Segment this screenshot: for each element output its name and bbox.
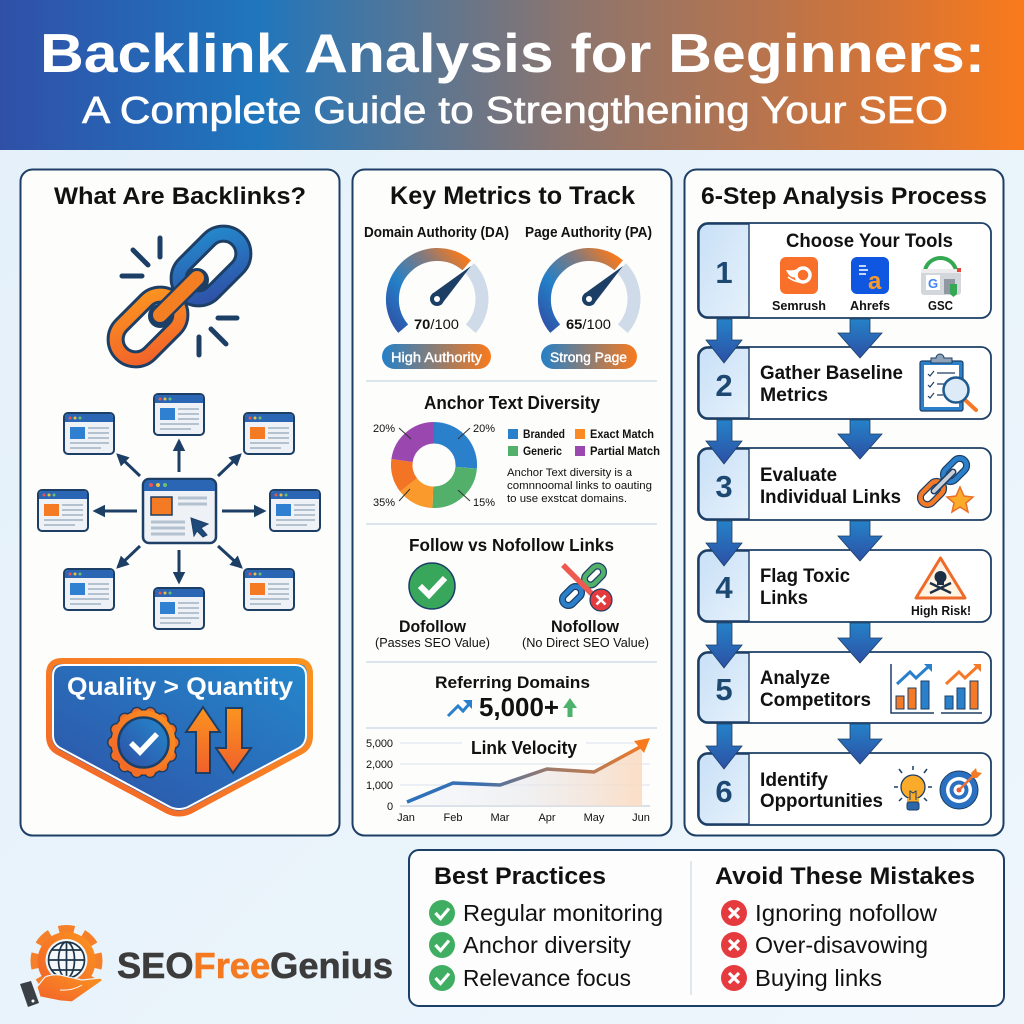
step 1: choose your tools: GSC — [928, 298, 954, 313]
mistakes list: Over-disavowing — [755, 932, 928, 958]
referring domains: Referring Domains — [435, 673, 590, 692]
heading: process: 6-Step Analysis Process — [701, 183, 987, 210]
step 6: identify opportunities — [698, 753, 991, 825]
diagram: site linking out to other sites — [38, 394, 320, 629]
step 3: evaluate individual links: Individual Links — [760, 487, 901, 508]
panel: what are backlinks — [20, 170, 340, 836]
gauge: page authority: Page Authority (PA) — [525, 225, 652, 241]
wordmark: SEOFreeGenius — [117, 945, 393, 986]
arrows: step 2 to 3 — [706, 420, 882, 464]
step 1: choose your tools: Semrush — [772, 298, 826, 313]
icon: ahrefs — [851, 257, 889, 295]
dofollow: Dofollow — [399, 617, 467, 636]
icon: chain link — [107, 225, 252, 368]
step 4: flag toxic links: Links — [760, 588, 808, 609]
step 1: choose your tools: Ahrefs — [850, 298, 890, 313]
arrows: step 5 to 6 — [706, 724, 882, 769]
step 3: evaluate individual links: Evaluate — [760, 465, 837, 486]
line chart: link velocity: 2,000 — [366, 759, 393, 771]
gauge: page authority: Strong Page — [550, 349, 627, 365]
line chart: link velocity: Mar — [491, 812, 510, 824]
step 2: gather baseline metrics: Metrics — [760, 385, 828, 406]
referring domains — [435, 673, 590, 722]
step 3: evaluate individual links — [698, 448, 991, 520]
icon: light bulb — [894, 766, 932, 810]
icon: toxic warning — [911, 558, 971, 618]
arrows: step 1 to 2 — [706, 319, 882, 363]
line chart: link velocity: Jan — [397, 812, 415, 824]
step 3: evaluate individual links: 3 — [715, 469, 733, 504]
icon: ahrefs: a — [868, 268, 882, 295]
badge: quality over quantity — [49, 661, 310, 814]
step 1: choose your tools: 1 — [715, 255, 733, 290]
text: anchor description: Anchor Text diversity is a — [507, 467, 633, 479]
best practices list: Best Practices — [434, 863, 606, 890]
best practices list: Relevance focus — [463, 965, 631, 991]
icon: two bar charts — [891, 664, 982, 713]
title: Backlink Analysis for Beginners: — [40, 22, 985, 84]
donut chart: anchor text: 20% — [373, 423, 395, 435]
arrows — [95, 441, 264, 582]
referring domains: 5,000+ — [479, 692, 559, 722]
donut chart: anchor text: 35% — [373, 497, 395, 509]
icon: google search console — [921, 258, 961, 297]
step 4: flag toxic links: 4 — [715, 570, 733, 605]
icon: gear, globe and hand — [20, 930, 102, 1007]
text: anchor description — [507, 467, 652, 505]
text: anchor description: comnnoomal links to oauting — [507, 480, 652, 492]
arrows: step 3 to 4 — [706, 521, 882, 566]
best practices list: Regular monitoring — [463, 900, 663, 926]
icon: target — [940, 768, 982, 809]
legend: anchor types: Partial Match — [590, 446, 660, 458]
step 2: gather baseline metrics: Gather Baseline — [760, 363, 903, 384]
mistakes list: Buying links — [755, 965, 882, 991]
gauge: domain authority: Domain Authority (DA) — [364, 225, 509, 241]
donut chart: anchor text — [373, 420, 495, 510]
mistakes list — [715, 863, 975, 991]
text: anchor description: to use exstcat domains. — [507, 493, 627, 505]
gauge: page authority — [525, 225, 652, 369]
line chart: link velocity: Feb — [444, 812, 462, 824]
heading: follow vs nofollow: Follow vs Nofollow Links — [409, 535, 614, 555]
icon: clipboard and magnifier — [920, 354, 976, 411]
legend: anchor types: Generic — [523, 446, 563, 458]
heading: anchor text diversity: Anchor Text Diversity — [424, 393, 600, 413]
line chart: link velocity: 1,000 — [366, 780, 393, 792]
logo: SEOFreeGenius — [20, 930, 393, 1007]
step 5: analyze competitors: 5 — [715, 672, 733, 707]
step 4: flag toxic links: Flag Toxic — [760, 566, 850, 587]
step 6: identify opportunities: 6 — [715, 774, 733, 809]
step 5: analyze competitors — [698, 652, 991, 723]
gauge: domain authority: High Authority — [391, 349, 482, 365]
line chart: link velocity: 0 — [387, 801, 393, 813]
step 6: identify opportunities: Opportunities — [760, 791, 883, 812]
step 1: choose your tools — [698, 223, 991, 318]
step 4: flag toxic links — [698, 550, 991, 622]
line chart: link velocity: 5,000 — [366, 738, 393, 750]
gauge: page authority: 65/100 — [566, 316, 611, 332]
best practices list — [429, 863, 663, 991]
line chart: link velocity: Link Velocity — [471, 738, 577, 758]
nofollow: Nofollow — [551, 617, 620, 636]
heading: what are backlinks: What Are Backlinks? — [54, 183, 306, 210]
line chart: link velocity: May — [584, 812, 605, 824]
legend: anchor types: Exact Match — [590, 429, 654, 441]
legend: anchor types — [508, 429, 660, 458]
icon: toxic warning: High Risk! — [911, 604, 971, 618]
central website window — [143, 479, 216, 543]
panel: 6-step process — [684, 170, 1004, 836]
subtitle: A Complete Guide to Strengthening Your SEO — [82, 90, 948, 132]
icon: links and star — [918, 456, 973, 512]
mistakes list: Avoid These Mistakes — [715, 863, 975, 890]
icon: semrush — [780, 257, 818, 294]
step 5: analyze competitors: Competitors — [760, 690, 871, 711]
dofollow — [375, 563, 490, 650]
header banner — [0, 0, 1024, 150]
icon: google search console: G — [928, 276, 938, 291]
heading: key metrics: Key Metrics to Track — [390, 182, 635, 210]
arrows between steps — [706, 319, 882, 769]
line chart: link velocity — [366, 738, 650, 824]
legend: anchor types: Branded — [523, 429, 565, 441]
nofollow: (No Direct SEO Value) — [522, 635, 649, 650]
step 2: gather baseline metrics — [698, 347, 991, 419]
step 6: identify opportunities: Identify — [760, 770, 828, 791]
badge text: Quality > Quantity — [67, 673, 293, 701]
panel: best practices and mistakes — [409, 850, 1004, 1006]
donut chart: anchor text: 15% — [473, 497, 495, 509]
step 2: gather baseline metrics: 2 — [715, 368, 733, 403]
icon: up arrow — [186, 707, 220, 773]
icon: green up arrow — [563, 698, 577, 717]
gauge: domain authority — [364, 225, 509, 369]
panel: key metrics — [352, 170, 672, 836]
step 1: choose your tools: Choose Your Tools — [786, 231, 953, 252]
icon: down arrow — [216, 708, 251, 773]
icon: trend arrow — [448, 700, 472, 716]
dofollow: (Passes SEO Value) — [375, 635, 490, 650]
gauge: domain authority: 70/100 — [414, 316, 459, 332]
line chart: link velocity: Apr — [538, 812, 556, 824]
arrows: step 4 to 5 — [706, 623, 882, 668]
mistakes list: Ignoring nofollow — [755, 900, 937, 926]
donut chart: anchor text: 20% — [473, 423, 495, 435]
line chart: link velocity: Jun — [632, 812, 650, 824]
best practices list: Anchor diversity — [463, 932, 632, 958]
website windows — [38, 394, 320, 629]
nofollow — [522, 563, 649, 650]
icon: seal with check — [110, 709, 177, 776]
step 5: analyze competitors: Analyze — [760, 668, 830, 689]
